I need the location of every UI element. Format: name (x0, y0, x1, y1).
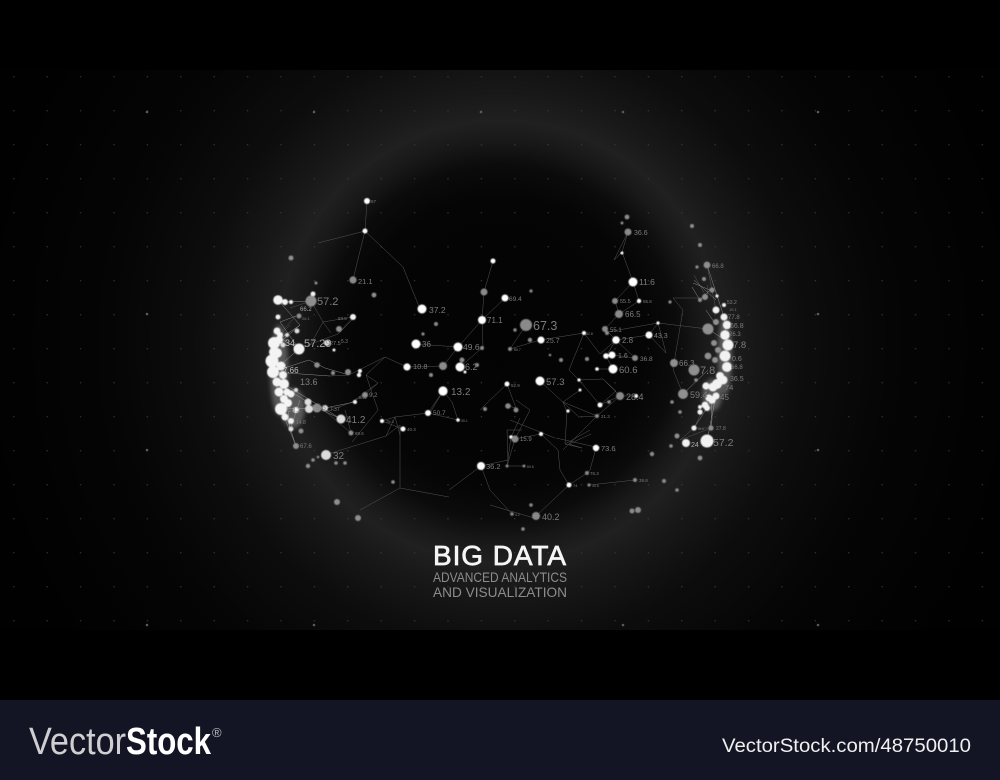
node value labels: 66.5 (625, 310, 641, 319)
node value labels: 89.6 (355, 431, 364, 436)
left cluster nodes (266, 292, 362, 424)
node value labels: 43.3 (654, 333, 668, 340)
node value labels: 27.5 (330, 341, 341, 347)
node value labels: 21.1 (358, 277, 373, 286)
node value labels: 55.8 (643, 299, 652, 304)
node value labels: 59.4 (690, 390, 708, 400)
node value labels: 10.8 (413, 362, 428, 371)
node value labels: 34 (285, 338, 295, 348)
node value labels: 65.7 (514, 348, 521, 352)
data nodes (266, 198, 734, 531)
node value labels: 7.8 (733, 340, 746, 351)
node value labels: 15.9 (520, 437, 532, 443)
node value labels: 14.8 (296, 420, 306, 426)
title: BIG DATA: BIG DATA (433, 540, 566, 571)
node value labels: 9.2 (369, 393, 378, 399)
node value labels: 4.2 (515, 513, 520, 517)
node value labels: 75.3 (386, 419, 395, 424)
node value labels: 27.8 (716, 426, 726, 432)
bright glow behind left and right clusters (270, 315, 732, 428)
node value labels: 69.4 (509, 296, 522, 303)
node value labels: 36.5 (730, 376, 744, 383)
node value labels: 36.2 (486, 462, 501, 471)
node value labels: 13.2 (288, 407, 301, 414)
subtitle: ADVANCED ANALYTICS (433, 569, 567, 585)
node value labels: 2.8 (622, 336, 634, 345)
node value labels: 50.7 (433, 410, 446, 417)
node value labels: 25.7 (546, 338, 560, 345)
node value labels: 7.37 (330, 407, 340, 413)
node value labels: 77.8 (728, 315, 740, 321)
node value labels: 36 (422, 340, 431, 349)
node value labels: 19.1 (729, 307, 738, 312)
node value labels: 39.8 (639, 478, 648, 483)
node value labels: 13.6 (300, 377, 318, 387)
node value labels: 67.3 (533, 319, 557, 333)
node value labels: 841 (359, 395, 367, 400)
glowing sphere background panel (0, 70, 1000, 630)
subtitle: AND VISUALIZATION (433, 584, 567, 600)
node value labels: 26.3 (729, 332, 741, 338)
footer url: VectorStock.com/48750010 (722, 735, 971, 757)
node value labels: 67.6 (300, 444, 312, 450)
footer logo: Vector (29, 721, 126, 763)
node value labels: 55.5 (620, 299, 631, 305)
right cluster nodes (682, 294, 734, 448)
node value labels: 52.9 (511, 383, 520, 388)
node value labels: 37.2 (429, 305, 446, 315)
footer logo: Stock (126, 721, 212, 763)
node value labels: 9.6 (316, 405, 326, 412)
node value labels: 40.6 (592, 484, 599, 488)
node value labels: 57.2 (317, 296, 338, 308)
node value labels: 82.8 (586, 332, 593, 336)
node value labels: 41.2 (346, 415, 366, 426)
node value labels: 40.2 (542, 512, 560, 522)
node value labels: 71.1 (487, 316, 503, 325)
node value labels: 36.8 (640, 356, 653, 363)
node value labels: 26.1 (302, 316, 311, 321)
node value labels: 7.8 (700, 365, 715, 377)
node value labels: 66.2 (300, 307, 312, 313)
node value labels: 40.3 (407, 427, 416, 432)
node value labels: 57 (371, 199, 377, 204)
node value labels (283, 199, 746, 522)
left cluster connection lines (272, 300, 355, 446)
node value labels: 66.8 (712, 264, 724, 270)
node value labels: 60.6 (619, 365, 638, 376)
node value labels: 21.3 (601, 414, 610, 419)
node value labels: 24 (691, 442, 699, 449)
node value labels: 66.8 (698, 427, 704, 431)
node value labels: 76.3 (590, 471, 599, 476)
node value labels: 5.3 (341, 339, 348, 345)
node value labels: 57.2 (713, 437, 734, 449)
right cluster connection lines (683, 265, 727, 441)
node value labels: 66.8 (730, 323, 744, 330)
node value labels: 53.2 (727, 300, 737, 306)
node value labels: 13.2 (451, 387, 471, 398)
node value labels: 11.6 (639, 277, 655, 287)
node value labels: 7.66 (283, 366, 299, 375)
node value labels: 57.3 (546, 377, 564, 388)
node value labels: 28.4 (626, 392, 644, 402)
node value labels: 55.1 (610, 328, 622, 334)
node value labels: 66.3 (679, 359, 695, 368)
node value labels: 32 (333, 451, 345, 462)
node value labels: 89.6 (527, 465, 534, 469)
node value labels: 1.6 (618, 353, 628, 360)
dot grid (0, 72, 1000, 628)
subtitle (433, 569, 567, 600)
node value labels: 0.6 (732, 356, 742, 363)
network connection lines (270, 201, 716, 518)
node value labels: 66.8 (731, 365, 743, 371)
node value labels: 36.6 (634, 230, 648, 237)
footer bar (0, 700, 1000, 780)
node value labels: 74 (725, 383, 733, 392)
central nodes (362, 198, 660, 488)
node value labels: 73.6 (601, 444, 616, 453)
node value labels: 45 (720, 393, 729, 402)
node value labels: 83.5 (338, 316, 347, 321)
node value labels: 74 (573, 483, 578, 488)
footer trademark: ® (212, 725, 222, 740)
node value labels: 57.29 (304, 338, 332, 350)
node value labels: 49.6 (463, 342, 480, 352)
node value labels: 35.1 (461, 419, 468, 423)
node value labels: 6.2 (465, 362, 478, 372)
footer logo (29, 721, 212, 763)
